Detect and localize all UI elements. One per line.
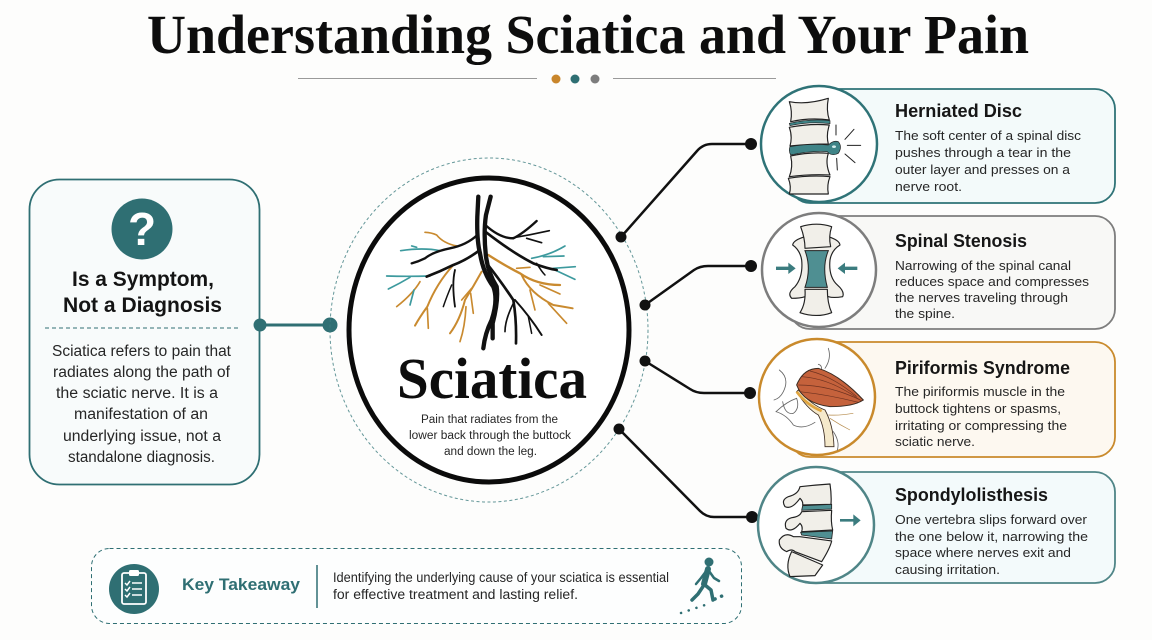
card text: the nerves traveling through — [895, 290, 1068, 305]
card text: Herniated Disc — [895, 101, 1022, 121]
central description — [409, 414, 571, 458]
card: spinal stenosis — [762, 213, 1115, 329]
card text: nerve root. — [895, 179, 962, 194]
icon: herniated disc — [788, 98, 861, 194]
icon: spondylolisthesis — [779, 484, 861, 577]
panel body text: the sciatic nerve. It is a — [56, 385, 218, 402]
central circle: sciatica — [330, 158, 648, 502]
callout text: Identifying the underlying cause of your sciatica is essential — [333, 570, 669, 585]
card text: The soft center of a spinal disc — [895, 128, 1082, 143]
title divider — [298, 74, 776, 84]
icon: question mark: ? — [128, 203, 156, 255]
card text: buttock tightens or spasms, — [895, 401, 1061, 416]
card text: Narrowing of the spinal canal — [895, 258, 1071, 273]
card: herniated disc — [761, 86, 1115, 203]
panel heading: Is a Symptom, — [72, 268, 214, 291]
callout text — [333, 570, 669, 602]
callout: key takeaway — [92, 548, 742, 624]
panel body text: radiates along the path of — [53, 364, 231, 381]
icon: walking person — [681, 558, 722, 613]
panel body text: manifestation of an — [74, 406, 208, 423]
card: piriformis syndrome — [759, 339, 1115, 457]
central heading: Sciatica — [397, 346, 587, 411]
card text — [895, 358, 1070, 449]
panel body text: underlying issue, not a — [63, 428, 221, 445]
card text: space where nerves exit and — [895, 545, 1071, 560]
central description: lower back through the buttock — [409, 430, 571, 442]
icon: clipboard — [109, 564, 159, 614]
card text — [895, 101, 1082, 194]
card text: irritating or compressing the — [895, 418, 1067, 433]
panel body text: standalone diagnosis. — [68, 449, 215, 466]
card text: sciatic nerve. — [895, 434, 975, 449]
card text: The piriformis muscle in the — [895, 384, 1065, 399]
card text: causing irritation. — [895, 562, 1000, 577]
title: Understanding Sciatica and Your Pain — [147, 4, 1029, 65]
card text: Spinal Stenosis — [895, 231, 1027, 251]
icon: sciatic nerve tree — [387, 197, 575, 348]
card: spondylolisthesis — [758, 467, 1115, 583]
card text: outer layer and presses on a — [895, 162, 1071, 177]
central description: Pain that radiates from the — [421, 414, 558, 426]
card text — [895, 231, 1090, 321]
callout heading: Key Takeaway — [182, 575, 301, 594]
card text: Piriformis Syndrome — [895, 358, 1070, 378]
panel body text — [52, 343, 232, 466]
card text: the spine. — [895, 306, 955, 321]
connector lines to causes — [614, 138, 758, 523]
panel heading: Not a Diagnosis — [63, 294, 222, 317]
card text: the one below it, narrowing the — [895, 529, 1088, 544]
icon: question mark — [112, 198, 172, 260]
central description: and down the leg. — [444, 446, 537, 458]
card text: pushes through a tear in the — [895, 145, 1071, 160]
card text — [895, 485, 1088, 577]
card text: Spondylolisthesis — [895, 485, 1048, 505]
panel: symptom not diagnosis — [30, 180, 260, 484]
card text: One vertebra slips forward over — [895, 512, 1088, 527]
card text: reduces space and compresses — [895, 274, 1090, 289]
icon: piriformis muscle — [774, 348, 863, 450]
panel heading — [63, 268, 222, 317]
connector: panel to circle — [254, 318, 338, 332]
panel body text: Sciatica refers to pain that — [52, 343, 232, 360]
callout text: for effective treatment and lasting relief. — [333, 587, 578, 602]
icon: spinal stenosis — [776, 224, 857, 315]
